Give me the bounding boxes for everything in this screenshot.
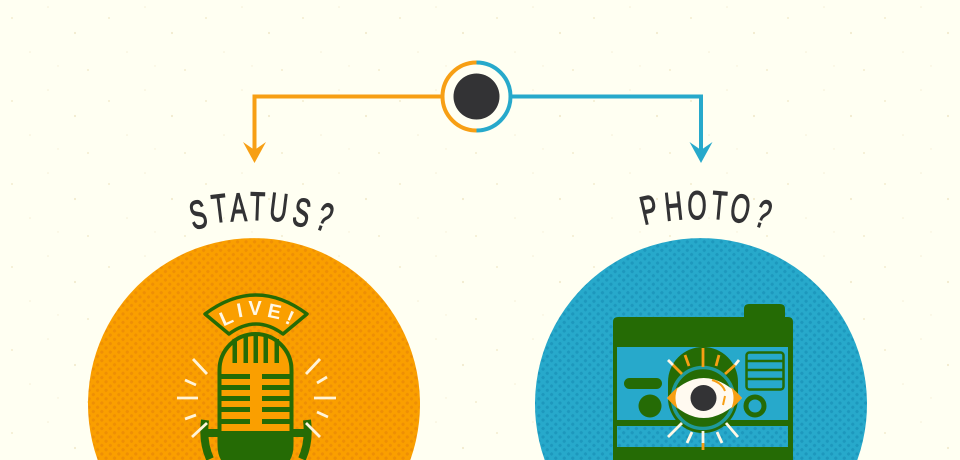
microphone body (218, 431, 294, 460)
icon: camera (613, 304, 793, 460)
heading: status: ? (310, 195, 338, 241)
heading: photo: T (710, 184, 729, 229)
camera dial (746, 397, 764, 415)
heading: status (186, 185, 338, 241)
camera lower strip (617, 426, 788, 447)
heading: photo: O (687, 184, 707, 229)
live banner: E (265, 300, 283, 324)
camera flash grid (746, 352, 784, 390)
live banner: L (217, 306, 237, 331)
camera button (638, 394, 662, 418)
heading: photo: O (727, 186, 754, 233)
live banner: I (235, 300, 245, 322)
camera slot (624, 378, 662, 389)
camera window (617, 347, 788, 420)
heading: status: U (267, 185, 290, 232)
heading: status: A (230, 186, 248, 231)
live banner: V (248, 298, 262, 320)
panel: status circle (88, 238, 420, 460)
sound rays (177, 359, 336, 437)
heading: photo: H (662, 184, 685, 230)
live banner (205, 295, 307, 334)
left branch arrow (243, 96, 442, 163)
right branch arrow (511, 96, 712, 163)
decision node (442, 62, 510, 130)
eye lens (667, 347, 742, 433)
heading: photo: P (636, 187, 662, 234)
heading: status: T (209, 186, 230, 232)
heading: status: S (186, 192, 211, 239)
heading: photo: ? (749, 192, 776, 238)
heading: status: S (289, 190, 314, 237)
panel: photo circle (535, 238, 867, 460)
heading: status: T (249, 185, 266, 230)
microphone stand (204, 420, 308, 459)
microphone head (220, 334, 292, 432)
live banner: ! (282, 307, 297, 330)
camera body (613, 304, 793, 460)
heading: photo (636, 184, 776, 238)
icon: microphone (177, 295, 336, 460)
eye rays (668, 348, 739, 450)
microphone grille (221, 334, 291, 424)
